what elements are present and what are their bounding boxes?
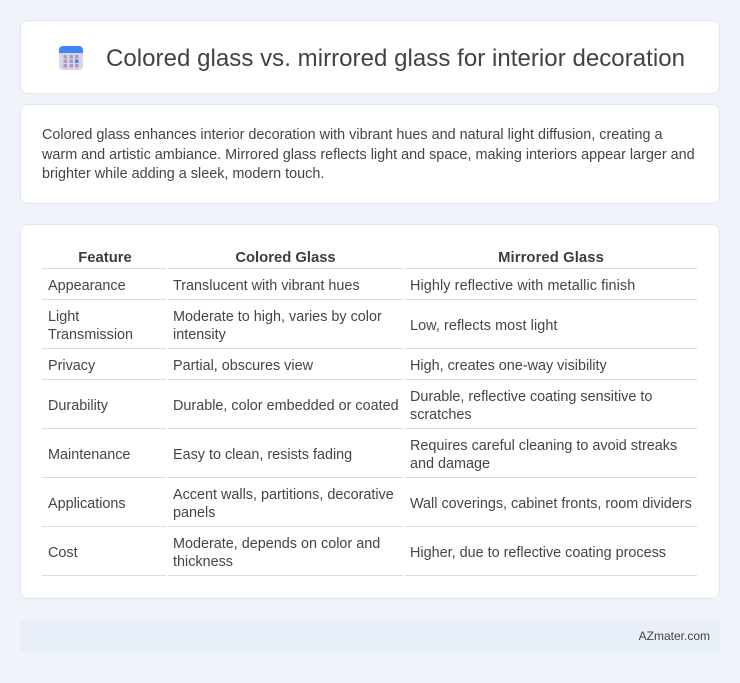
row: applications: Applications (48, 496, 126, 512)
icon: calendar (59, 46, 83, 70)
row: privacy: Privacy (48, 358, 95, 374)
table header (78, 250, 604, 266)
row: applications: panels (173, 505, 215, 521)
panel: comparison table (20, 224, 720, 599)
row: light transmission: Moderate to high, varies by color (173, 309, 382, 325)
row: appearance: Translucent with vibrant hues (173, 278, 360, 294)
row: maintenance (48, 438, 677, 472)
row: maintenance: Easy to clean, resists fading (173, 447, 352, 463)
intro text: warm and artistic ambiance. Mirrored glass reflects light and space, making interiors appear larger and (42, 146, 695, 162)
row: cost: Cost (48, 545, 78, 561)
row: light transmission: Low, reflects most light (410, 318, 557, 334)
row: appearance (48, 278, 635, 294)
row: cost (48, 536, 666, 570)
row: light transmission: intensity (173, 327, 226, 343)
row: maintenance: Requires careful cleaning to avoid streaks (410, 438, 677, 454)
row: cost: Moderate, depends on color and (173, 536, 380, 552)
row: durability: Durable, reflective coating sensitive to (410, 389, 652, 405)
row: privacy: High, creates one-way visibility (410, 358, 607, 374)
intro text (42, 127, 695, 182)
row: light transmission (48, 309, 558, 343)
row: durability: Durable, color embedded or coated (173, 398, 399, 414)
row: privacy (48, 358, 607, 374)
table header: Mirrored Glass (498, 250, 604, 266)
footer credit: AZmater.com (639, 629, 710, 643)
row: applications (48, 487, 692, 521)
intro text: Colored glass enhances interior decoration with vibrant hues and natural light diffusion, creating a (42, 127, 663, 143)
row: durability: Durability (48, 398, 108, 414)
row: applications: Accent walls, partitions, decorative (173, 487, 394, 503)
row: appearance: Appearance (48, 278, 126, 294)
row: appearance: Highly reflective with metallic finish (410, 278, 635, 294)
row: cost: Higher, due to reflective coating process (410, 545, 666, 561)
table header: Feature (78, 250, 132, 266)
row: cost: thickness (173, 554, 233, 570)
row: maintenance: Maintenance (48, 447, 130, 463)
row: maintenance: and damage (410, 456, 490, 472)
panel: introduction (20, 104, 720, 204)
row: privacy: Partial, obscures view (173, 358, 313, 374)
row: applications: Wall coverings, cabinet fronts, room dividers (410, 496, 692, 512)
row: durability (48, 389, 652, 423)
panel: title card (20, 20, 720, 94)
title: Colored glass vs. mirrored glass for interior decoration (106, 45, 685, 72)
footer bar (20, 619, 720, 653)
intro text: brighter while adding a sleek, modern touch. (42, 166, 324, 182)
table header: Colored Glass (235, 250, 336, 266)
row: light transmission: Light (48, 309, 79, 325)
row: light transmission: Transmission (48, 327, 133, 343)
row: durability: scratches (410, 407, 472, 423)
